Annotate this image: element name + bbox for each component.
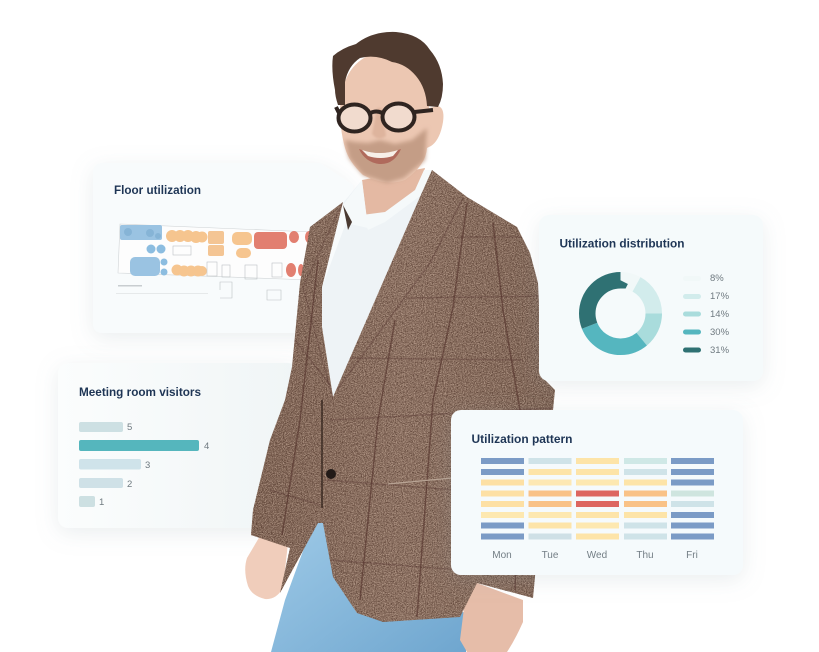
day labels: Fri bbox=[686, 550, 698, 561]
heatmap bbox=[481, 458, 714, 540]
legend: 17% bbox=[710, 291, 730, 302]
legend: 30% bbox=[710, 327, 730, 338]
person bbox=[245, 32, 560, 652]
day labels: Thu bbox=[636, 550, 654, 561]
heading: utilization pattern: Utilization pattern bbox=[472, 432, 572, 446]
heading: utilization distribution: Utilization distribution bbox=[560, 236, 684, 250]
heading: meeting room visitors: Meeting room visitors bbox=[79, 385, 201, 399]
smile bbox=[359, 149, 401, 164]
beard bbox=[345, 128, 427, 183]
jeans bbox=[271, 510, 466, 652]
jacket bbox=[245, 165, 560, 625]
bar chart: 4 bbox=[204, 441, 209, 452]
bar chart: 1 bbox=[99, 497, 104, 508]
legend: 14% bbox=[710, 309, 730, 320]
day labels: Mon bbox=[492, 550, 512, 561]
day labels: Tue bbox=[542, 550, 559, 561]
day labels bbox=[492, 550, 698, 561]
glasses bbox=[336, 104, 433, 132]
donut chart bbox=[587, 280, 654, 347]
panel: meeting room visitors bbox=[58, 363, 298, 528]
day labels: Wed bbox=[587, 550, 607, 561]
jacket button bbox=[326, 469, 336, 479]
legend: 8% bbox=[710, 273, 724, 284]
legend bbox=[683, 273, 730, 356]
bar chart: 2 bbox=[127, 479, 132, 490]
floor plan bbox=[116, 224, 313, 300]
heading: floor utilization: Floor utilization bbox=[114, 183, 201, 197]
bar chart: 3 bbox=[145, 460, 150, 471]
hand: right bbox=[460, 583, 523, 652]
hair bbox=[332, 32, 443, 107]
bar chart: 5 bbox=[127, 422, 132, 433]
panel: utilization pattern bbox=[451, 410, 743, 575]
bar chart bbox=[79, 422, 209, 508]
neck and shirt bbox=[322, 168, 432, 397]
panel: utilization distribution bbox=[539, 215, 763, 381]
head bbox=[332, 32, 443, 183]
hand: left bbox=[245, 536, 288, 599]
panel: floor utilization bbox=[93, 163, 353, 333]
legend: 31% bbox=[710, 345, 730, 356]
